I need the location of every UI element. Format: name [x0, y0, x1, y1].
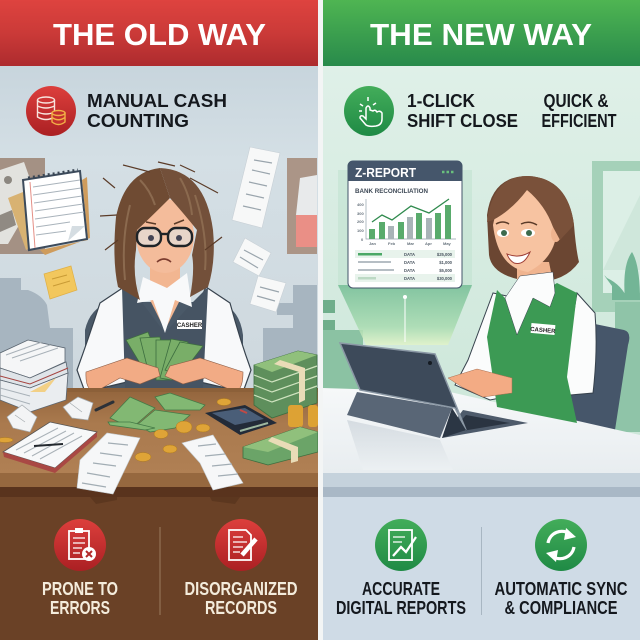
cash stacks and coins [243, 351, 318, 465]
heading: the old way [0, 0, 320, 66]
z-report card: Z-REPORT [355, 165, 416, 180]
heading: the new way [323, 0, 640, 66]
bar chart: 400 [357, 202, 364, 207]
bar chart: Feb [388, 241, 396, 246]
data table: $1,000 [439, 260, 453, 265]
bar chart: Jan [369, 241, 376, 246]
hair back [487, 176, 579, 282]
data table: $30,000 [437, 276, 453, 281]
receipts on desk [77, 433, 243, 494]
pointing hand [448, 369, 512, 397]
text: accurate digital reports [336, 578, 466, 618]
bar chart: 100 [357, 228, 364, 233]
ear [551, 226, 561, 242]
panel: light footer [323, 473, 640, 640]
corkboards with papers [0, 158, 317, 254]
bar chart: 300 [357, 211, 364, 216]
data table: $25,000 [437, 252, 453, 257]
bar chart: 0 [361, 237, 364, 242]
text: quick and efficient: QUICK & [544, 90, 608, 111]
name tag [177, 320, 203, 329]
data table: $5,000 [439, 268, 453, 273]
text: prone to errors [42, 578, 118, 618]
tablet and keyboard [340, 343, 528, 438]
crumpled paper [7, 397, 93, 432]
notepad [23, 170, 90, 255]
bar chart: 200 [357, 219, 364, 224]
name tag [530, 323, 556, 335]
shirt sleeves [77, 287, 251, 392]
pen [96, 402, 113, 410]
forearms and hands [86, 358, 160, 392]
icon: report with chart [375, 519, 427, 571]
text: accurate digital reports: DIGITAL REPORTS [336, 597, 466, 618]
panel: old way [0, 0, 320, 640]
vest [122, 287, 208, 388]
z-report card: BANK RECONCILIATION [355, 188, 428, 195]
icon: cash and coins [26, 86, 76, 136]
text: manual cash counting: COUNTING [87, 110, 189, 131]
cash pile on desk [108, 393, 205, 432]
hair front [487, 176, 574, 240]
text: quick and efficient [542, 90, 617, 131]
tablet reflection [347, 420, 453, 470]
panel: brown footer [0, 497, 318, 640]
background office silhouettes [0, 278, 317, 392]
name tag: CASHER [177, 323, 203, 329]
data table: DATA [404, 260, 415, 265]
text: quick and efficient: EFFICIENT [542, 110, 617, 131]
white desk [323, 388, 640, 473]
spiral notebook [3, 422, 97, 473]
bar chart: May [443, 241, 452, 246]
data table: DATA [404, 276, 415, 281]
z-report card [348, 161, 462, 288]
bar chart [357, 199, 456, 246]
cash fan [126, 332, 203, 380]
data table: DATA [404, 252, 415, 257]
connector line [403, 295, 407, 342]
stack of papers [0, 340, 68, 412]
eyes and smile [496, 222, 537, 264]
text: 1-click shift close: 1-CLICK [407, 90, 476, 111]
text: disorganized records [184, 578, 298, 618]
text: 1-click shift close: SHIFT CLOSE [407, 110, 518, 131]
cashier: smiling woman [448, 176, 596, 423]
neck and collar [517, 262, 553, 290]
text: accurate digital reports: ACCURATE [362, 578, 440, 599]
brow and under-eye [146, 220, 184, 224]
background furniture [323, 161, 640, 432]
text: manual cash counting [87, 90, 227, 131]
icon: tap hand [344, 86, 394, 136]
text: manual cash counting: MANUAL CASH [87, 90, 227, 111]
calculator [205, 405, 277, 435]
coins on desk [0, 398, 231, 462]
bar chart: Apr [425, 241, 432, 246]
icon: sync arrows [535, 519, 587, 571]
text: prone to errors: ERRORS [50, 597, 110, 618]
messy hair [100, 162, 222, 300]
name tag: CASHER [530, 327, 556, 335]
mouth [157, 259, 171, 262]
bar chart: Mar [407, 241, 415, 246]
heading: the new way: THE NEW WAY [370, 18, 592, 52]
icon: document with pencil [215, 519, 267, 571]
neck and collar [150, 262, 180, 330]
text: 1-click shift close [407, 90, 518, 131]
face [136, 199, 194, 273]
vest [487, 283, 577, 423]
text: disorganized records: RECORDS [205, 597, 277, 618]
floating receipts [232, 147, 286, 312]
data table: DATA [404, 268, 415, 273]
text: prone to errors: PRONE TO [42, 578, 118, 599]
chair [570, 323, 629, 430]
projection glow [338, 170, 472, 345]
divider [318, 0, 323, 640]
glasses [137, 228, 192, 246]
panel: new way [323, 0, 640, 640]
text: disorganized records: DISORGANIZED [184, 578, 298, 599]
face [493, 190, 557, 272]
chair [85, 302, 243, 390]
data table [355, 250, 455, 282]
shirt [455, 293, 596, 400]
heading: the old way: THE OLD WAY [53, 18, 266, 52]
cashier: stressed woman [77, 162, 251, 392]
icon: clipboard with x [54, 519, 106, 571]
sticky note [44, 266, 77, 299]
desk [0, 388, 318, 497]
text: automatic sync and compliance [494, 578, 628, 618]
